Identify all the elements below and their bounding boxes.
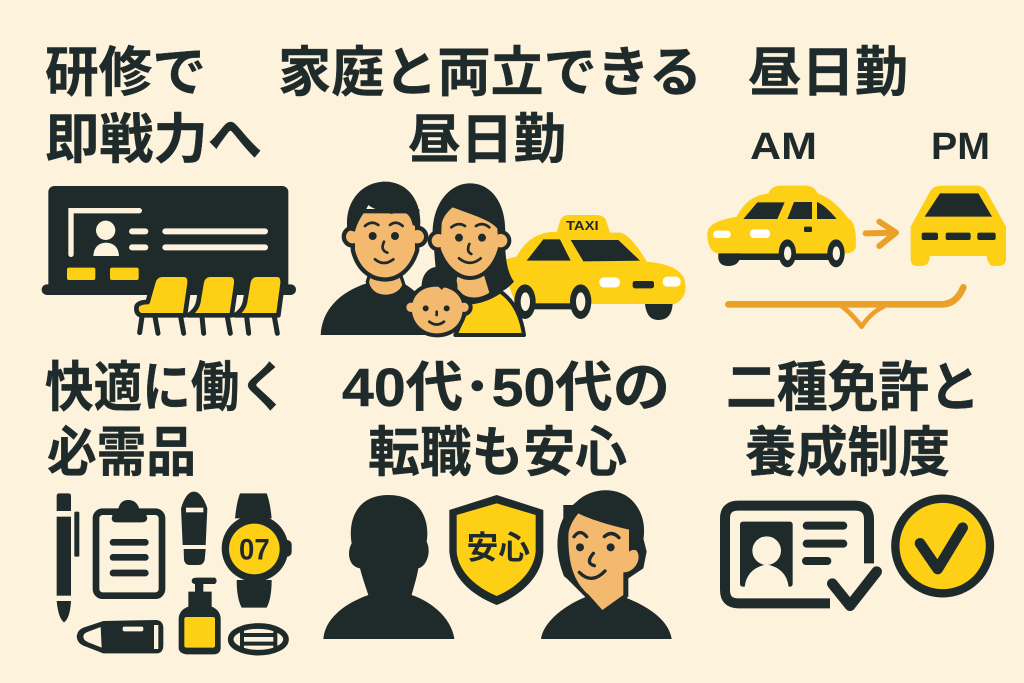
heading: license and training system: 二種免許と bbox=[726, 358, 980, 418]
pen bbox=[57, 493, 79, 622]
icon: reassurance shield bbox=[449, 495, 543, 605]
heading: balance with family: 家庭と両立できる bbox=[278, 43, 702, 103]
watch: 07 bbox=[239, 534, 270, 567]
woman bbox=[432, 183, 524, 335]
face mask bbox=[231, 626, 286, 653]
heading: career change in 40s and 50s: 40代･50代の bbox=[342, 358, 670, 418]
icon: taxi behind family: TAXI bbox=[566, 218, 599, 233]
icon: family of three bbox=[321, 182, 524, 335]
heading: balance with family bbox=[278, 43, 702, 170]
heading: career change in 40s and 50s: 転職も安心 bbox=[368, 423, 627, 483]
icon: classroom board with chairs bbox=[42, 186, 296, 333]
icon: reassurance shield: 安心 bbox=[467, 529, 530, 565]
label: AM: AM bbox=[750, 126, 817, 168]
marker bbox=[77, 620, 163, 653]
baby bbox=[406, 267, 469, 333]
heading: license and training system: 養成制度 bbox=[745, 423, 950, 483]
pump bottle bbox=[179, 578, 221, 654]
heading: training: 研修で bbox=[45, 43, 206, 103]
heading: training: 即戦力へ bbox=[45, 110, 262, 170]
heading: essentials: 快適に働く bbox=[45, 358, 288, 418]
arrow: AM to PM bbox=[866, 222, 896, 246]
heading: training bbox=[45, 43, 262, 170]
icon: taxi side view bbox=[707, 186, 856, 267]
icon: license card with check bbox=[725, 506, 877, 606]
icon: smiling middle-aged man bbox=[541, 490, 672, 639]
heading: license and training system bbox=[726, 358, 980, 483]
icon: taxi behind family bbox=[505, 215, 686, 320]
heading: essentials bbox=[45, 358, 288, 483]
heading: balance with family: 昼日勤 bbox=[408, 110, 566, 170]
clipboard bbox=[96, 500, 162, 596]
bracket: day shift span bbox=[728, 287, 963, 327]
tube bbox=[181, 492, 207, 565]
icon: silhouette person bbox=[323, 495, 454, 639]
watch bbox=[222, 493, 292, 608]
icon: essentials bbox=[57, 492, 292, 654]
icon: yellow check badge bbox=[895, 499, 990, 593]
label: PM: PM bbox=[931, 126, 990, 168]
icon: taxi front view bbox=[911, 186, 1006, 266]
heading: career change in 40s and 50s bbox=[342, 358, 670, 483]
heading: day shift: 昼日勤 bbox=[748, 43, 908, 103]
heading: essentials: 必需品 bbox=[47, 423, 196, 483]
man bbox=[321, 182, 425, 335]
